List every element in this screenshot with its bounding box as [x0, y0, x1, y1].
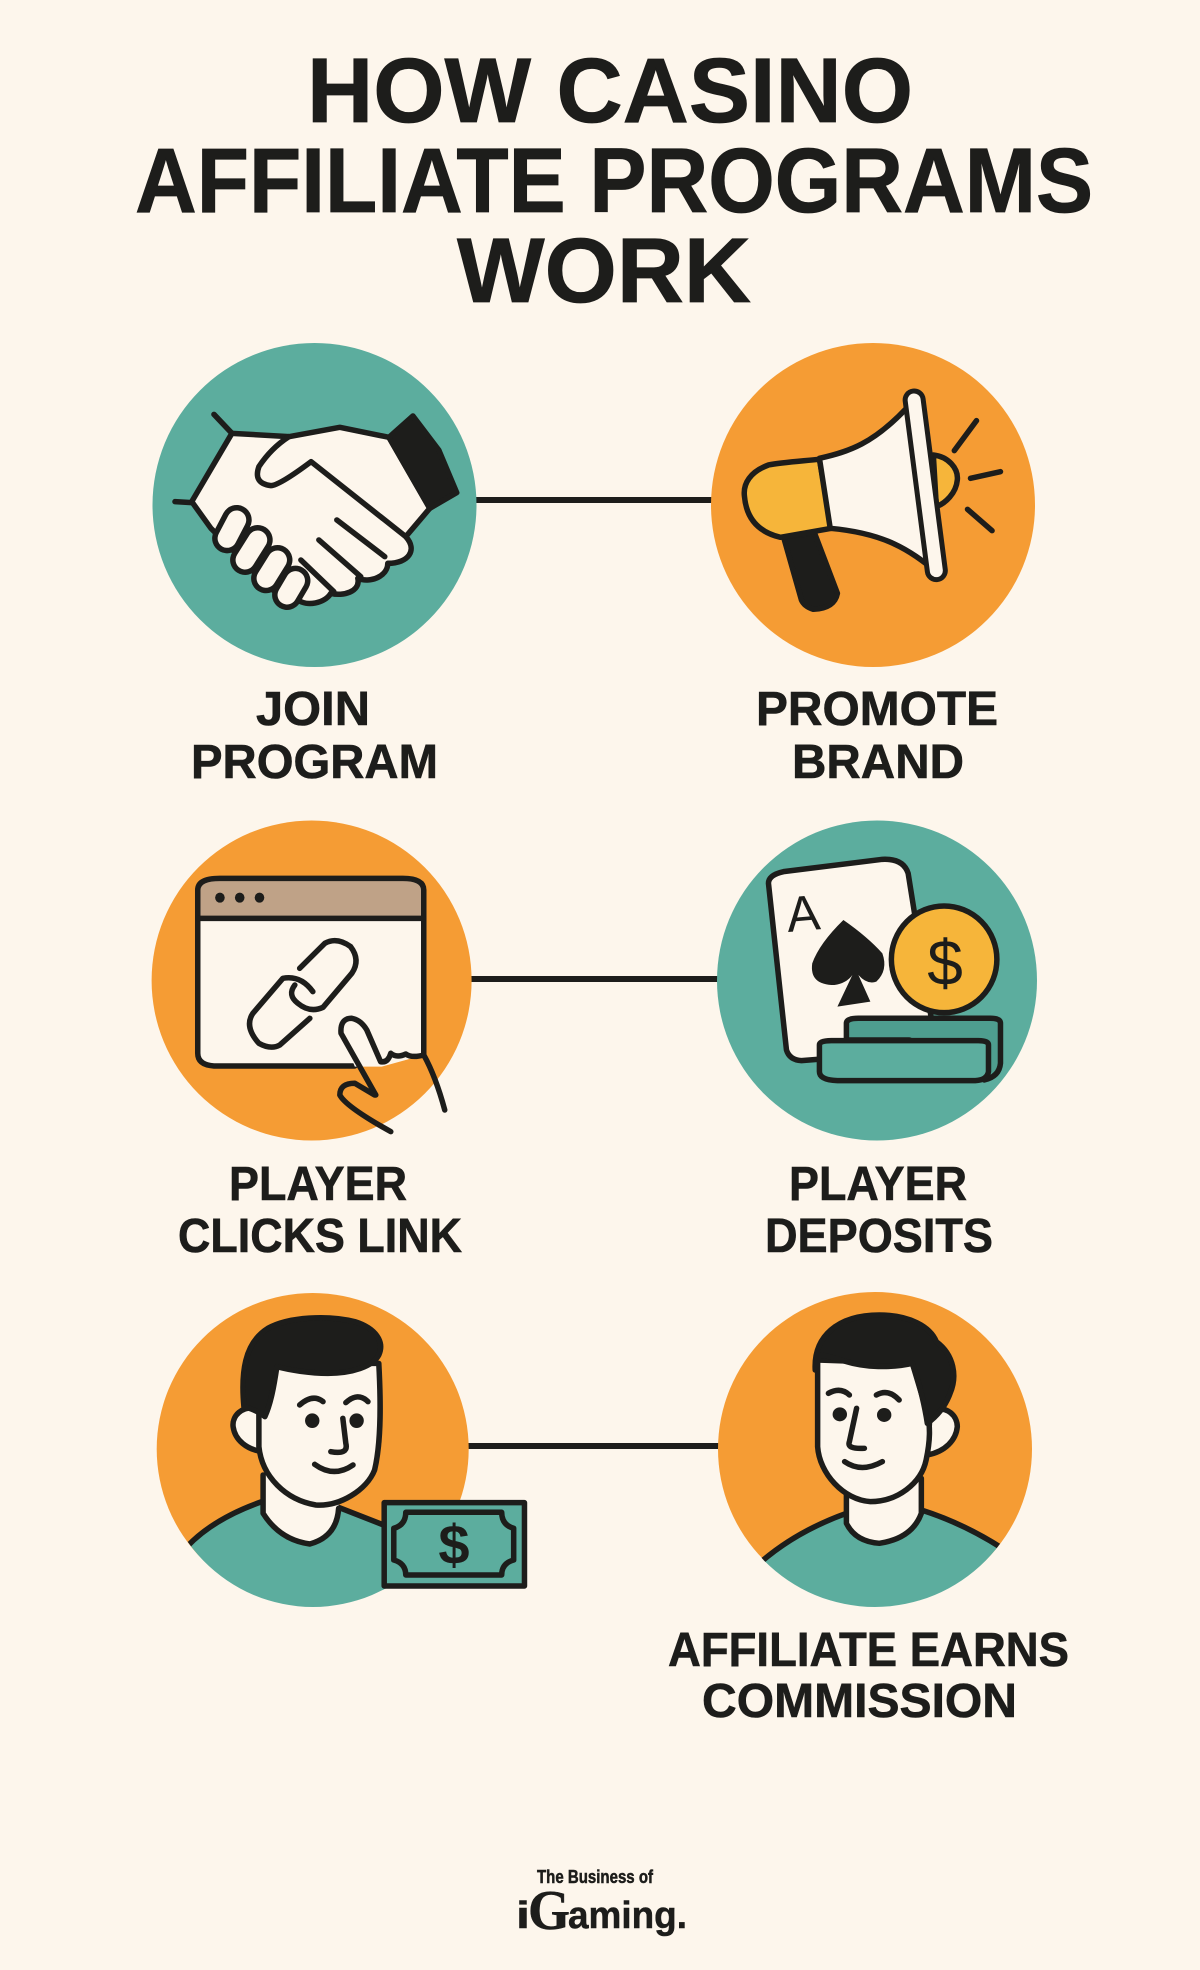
logo: The Business of iGaming: aming. [568, 1895, 687, 1937]
circle: orange [152, 820, 472, 1140]
label: affiliate earns commission [668, 1624, 1069, 1728]
label: player deposits: PLAYER [789, 1158, 967, 1211]
title: HOW CASINO [307, 40, 913, 142]
logo: The Business of iGaming: The Business of [537, 1867, 654, 1887]
label: player clicks link: CLICKS LINK [178, 1210, 462, 1263]
label: player deposits: DEPOSITS [765, 1210, 993, 1263]
icon: megaphone [744, 400, 1000, 609]
circle: teal [717, 820, 1037, 1140]
title: AFFILIATE PROGRAMS [135, 130, 1093, 232]
icon: smiling player [188, 1315, 386, 1607]
panel: affiliate earns commission [718, 1292, 1032, 1627]
circle: orange [711, 343, 1035, 667]
panel: promote brand [711, 343, 1035, 667]
circle: orange [718, 1292, 1032, 1606]
icon: ace card, coin and bills: $ [927, 927, 963, 999]
label: player deposits [765, 1158, 993, 1263]
panel: player with cash [157, 1293, 524, 1627]
panel: player clicks link [152, 820, 472, 1140]
label: promote brand: PROMOTE [756, 683, 998, 736]
logo: The Business of iGaming [516, 1867, 687, 1942]
title: WORK [457, 220, 751, 322]
label: affiliate earns commission: AFFILIATE EARNS [668, 1624, 1069, 1677]
icon: handshake [175, 414, 457, 603]
label: player clicks link [178, 1158, 462, 1263]
icon: dollar bill: $ [438, 1513, 470, 1576]
label: player clicks link: PLAYER [229, 1158, 407, 1211]
label: join program: PROGRAM [191, 736, 438, 789]
label: join program: JOIN [256, 683, 370, 736]
icon: dollar bill [384, 1503, 524, 1586]
panel: join program [152, 343, 476, 667]
title [135, 40, 1093, 322]
connector: player to affiliate [466, 1443, 721, 1449]
panel: player deposits [717, 820, 1037, 1140]
icon: ace card, coin and bills [768, 859, 1000, 1081]
circle: orange [157, 1293, 469, 1605]
icon: browser window with link and pointing hand [198, 878, 445, 1132]
label: join program [191, 683, 438, 789]
label: affiliate earns commission: COMMISSION [702, 1675, 1017, 1728]
label: promote brand [756, 683, 998, 789]
circle: teal [152, 343, 476, 667]
icon: ace card, coin and bills: A [784, 884, 823, 943]
connector: clicks to deposits [470, 976, 719, 982]
logo: The Business of iGaming: G [528, 1880, 570, 1942]
icon: smiling affiliate [762, 1312, 1000, 1607]
label: promote brand: BRAND [792, 736, 964, 789]
logo: The Business of iGaming: i [516, 1895, 530, 1937]
connector: join to promote [474, 497, 714, 503]
